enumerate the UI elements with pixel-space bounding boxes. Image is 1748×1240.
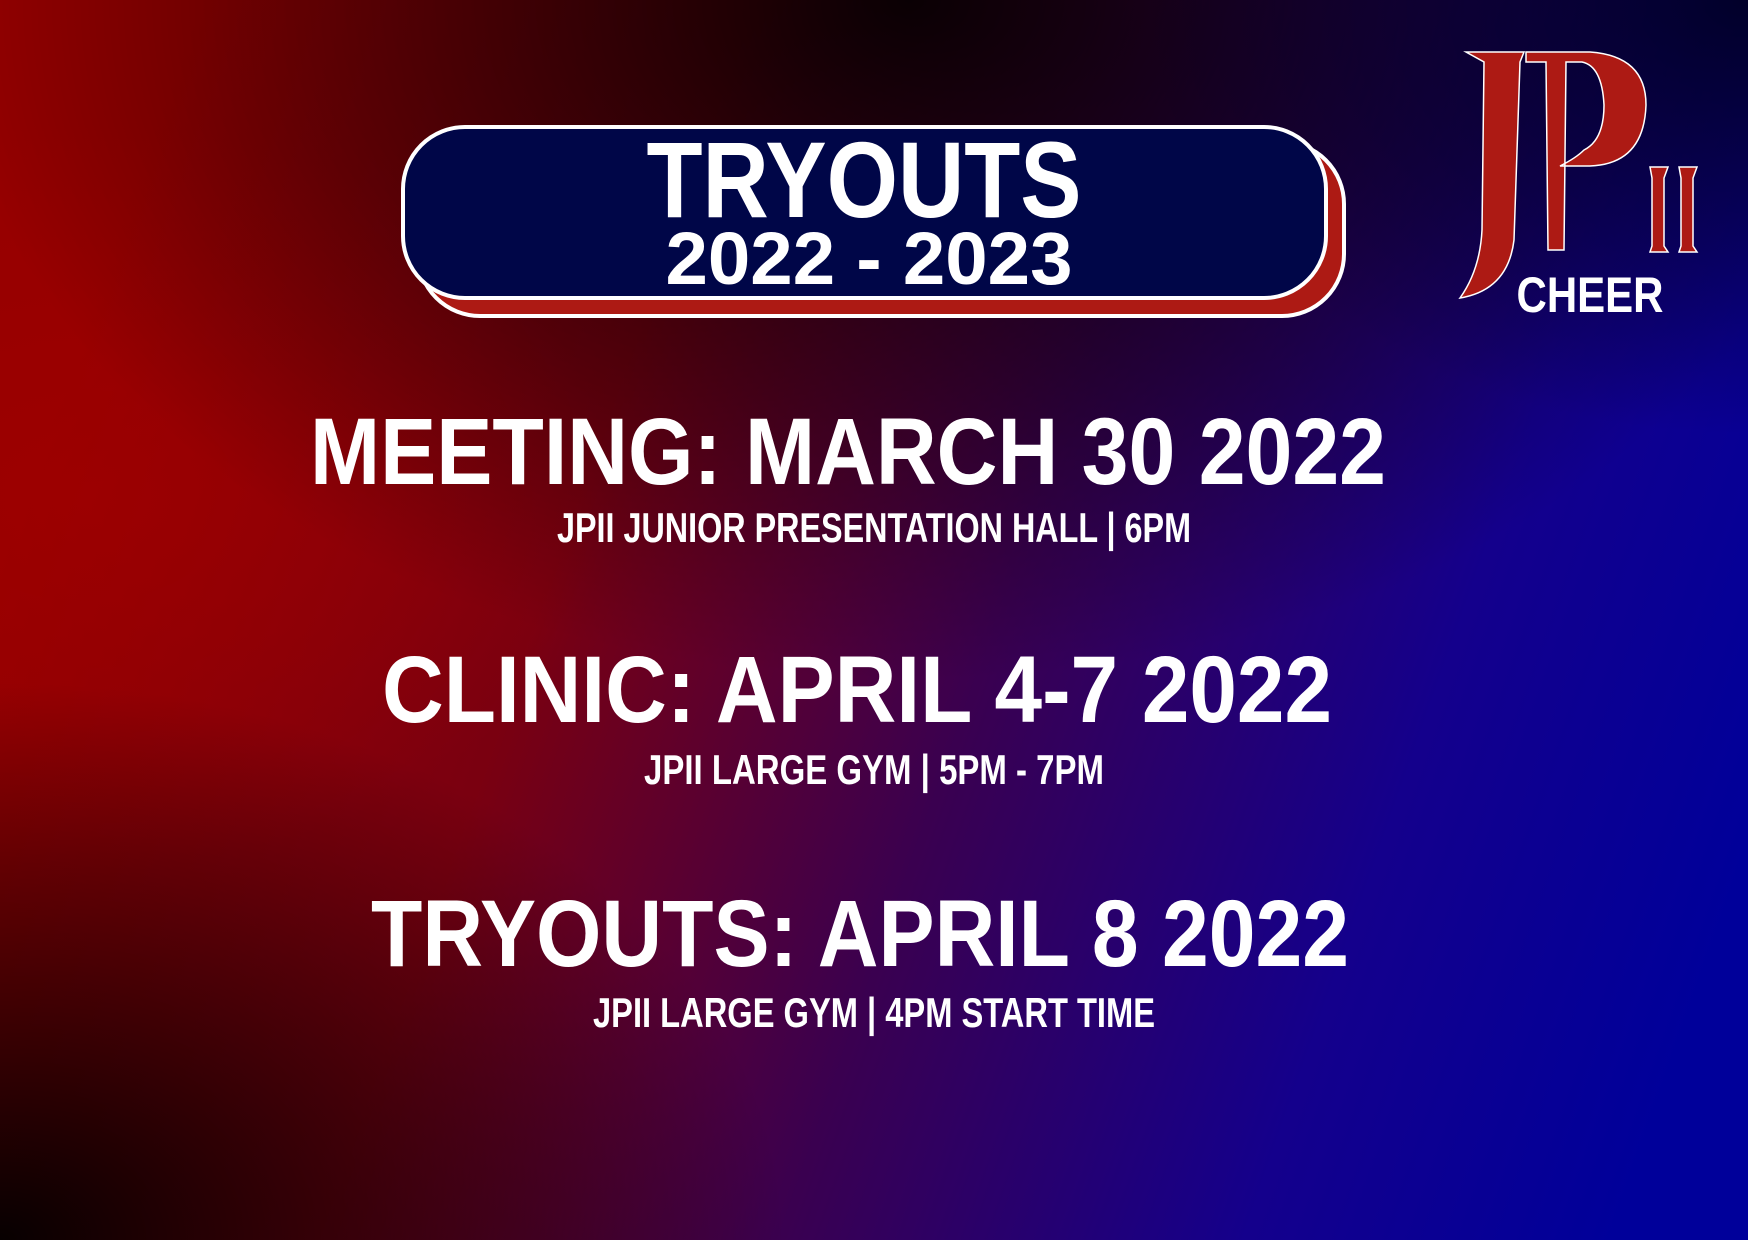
clinic details: JPII LARGE GYM | 5PM - 7PM: [644, 746, 1104, 794]
logo cheer text: CHEER: [1516, 267, 1664, 323]
banner shadow: [418, 142, 1344, 316]
event: clinic: [382, 637, 1332, 794]
event: meeting: [310, 399, 1386, 552]
title banner: [403, 119, 1344, 316]
logo letters: [1460, 52, 1697, 298]
logo: JPII cheer: [1460, 52, 1697, 323]
event: tryouts: [371, 881, 1349, 1037]
banner box: [403, 127, 1326, 298]
meeting details: JPII JUNIOR PRESENTATION HALL | 6PM: [557, 504, 1191, 552]
title text: TRYOUTS: [646, 119, 1082, 240]
clinic heading: CLINIC: APRIL 4-7 2022: [382, 637, 1332, 743]
tryouts heading: TRYOUTS: APRIL 8 2022: [371, 881, 1349, 987]
tryouts details: JPII LARGE GYM | 4PM START TIME: [593, 989, 1155, 1037]
meeting heading: MEETING: MARCH 30 2022: [310, 399, 1386, 505]
season years: 2022 - 2023: [666, 217, 1072, 300]
